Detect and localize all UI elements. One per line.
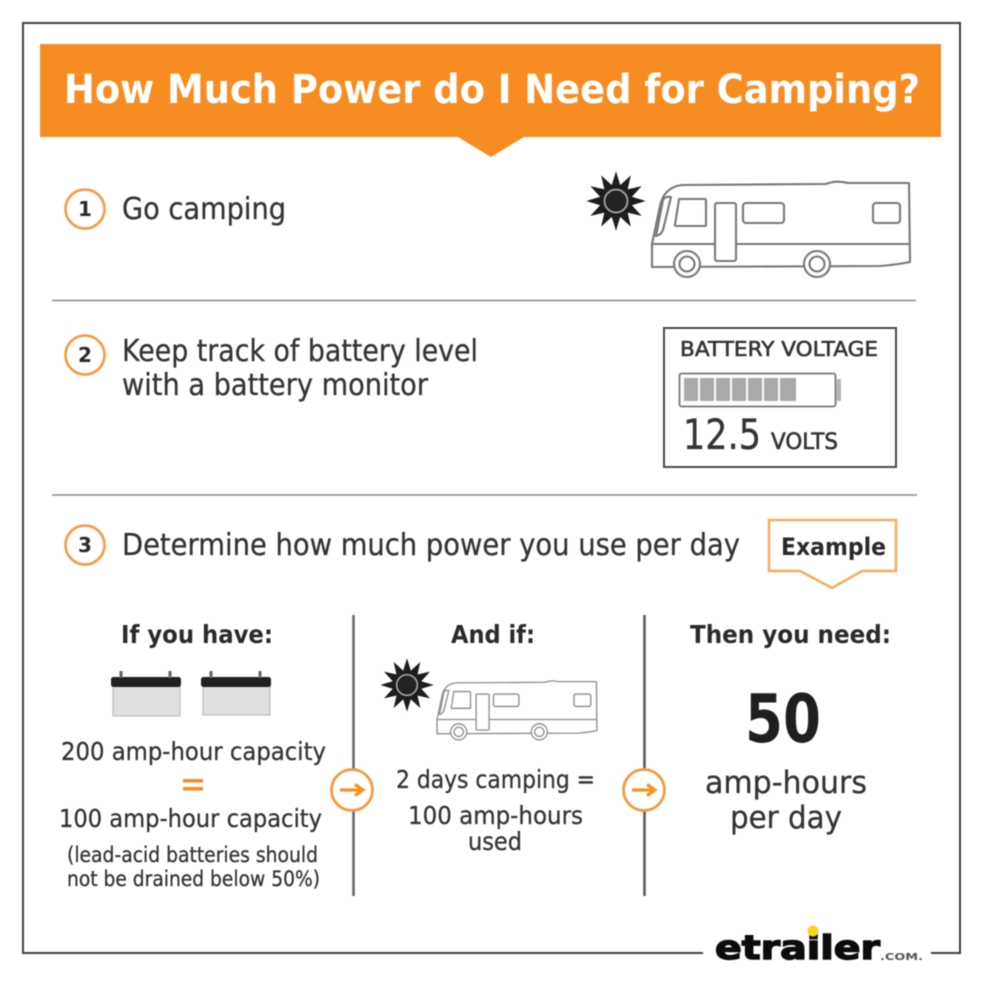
column heading: If you have: (121, 620, 273, 649)
amp-hours used text: used (468, 827, 522, 856)
capacity text: 200 amp-hour capacity (61, 737, 326, 766)
lead-acid note: (lead-acid batteries should (67, 843, 318, 867)
step 3 number badge (66, 526, 104, 564)
icon: two batteries (111, 671, 271, 716)
days camping text: 2 days camping = (396, 765, 595, 794)
step 1 (66, 190, 286, 228)
step 2 number badge: 2 (78, 343, 92, 367)
callout: example: Example (781, 533, 886, 561)
big number: 50 (745, 680, 821, 758)
step 2 text: with a battery monitor (122, 368, 429, 403)
volts unit: VOLTS (771, 430, 838, 455)
column divider right (643, 615, 646, 896)
result unit: amp-hours (705, 765, 867, 801)
icon: sun and motorhome small (382, 660, 597, 740)
panel: then you need (690, 620, 891, 836)
lead-acid note: not be drained below 50%) (67, 867, 320, 891)
title: How Much Power do I Need for Camping? (64, 67, 920, 113)
panel: if you have (59, 620, 326, 891)
usable capacity text: 100 amp-hour capacity (59, 804, 322, 833)
column heading: Then you need: (690, 620, 891, 649)
step 1 number badge: 1 (78, 197, 92, 221)
step 2 number badge (66, 336, 104, 374)
orange equals sign (183, 779, 203, 790)
battery level gauge (680, 374, 841, 406)
column heading: And if: (451, 620, 535, 649)
icon: sun and motorhome (588, 173, 910, 277)
step 3 (66, 526, 740, 564)
logo: etrailer.com (715, 926, 923, 967)
logo: etrailer.com: .COM. (880, 952, 923, 963)
step 1 text: Go camping (122, 192, 286, 227)
arrow: first column to second (332, 770, 372, 810)
arrow: second column to third (624, 770, 664, 810)
step 2 text: Keep track of battery level (122, 334, 478, 369)
amp-hours used text: 100 amp-hours (408, 801, 583, 830)
panel: battery voltage monitor (664, 328, 896, 467)
step 3 number badge: 3 (78, 533, 92, 557)
callout: example (769, 520, 896, 588)
voltage reading: 12.5 (683, 410, 761, 459)
step 1 number badge (66, 190, 104, 228)
result unit: per day (730, 800, 842, 836)
logo: etrailer.com: etrailer (715, 928, 881, 967)
panel: and if (382, 620, 597, 856)
battery voltage heading: BATTERY VOLTAGE (680, 337, 878, 361)
step 3 text: Determine how much power you use per day (122, 528, 740, 563)
column divider left (352, 615, 355, 896)
step 2 (66, 334, 488, 403)
title banner (40, 44, 941, 157)
